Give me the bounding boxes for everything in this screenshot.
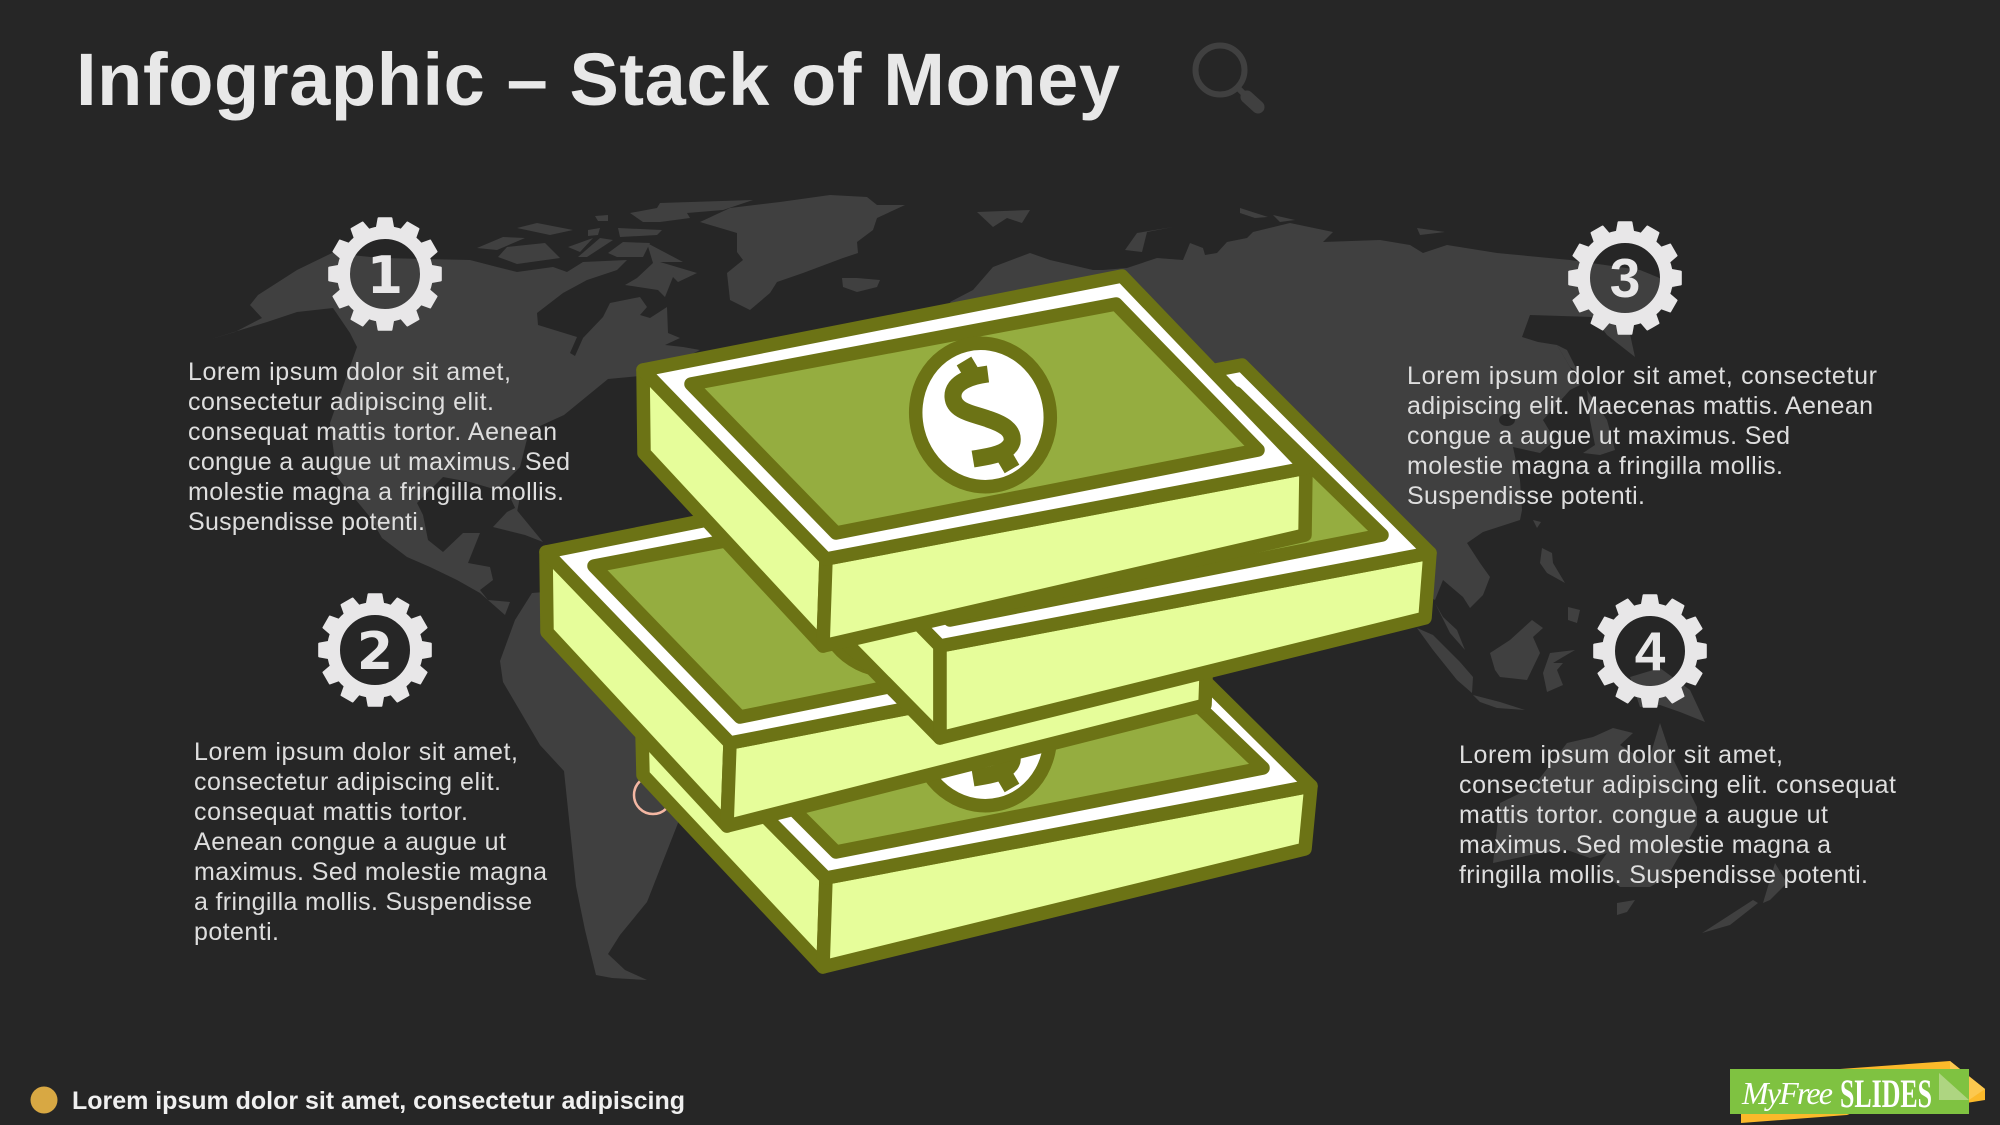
icon: gear 4: 4 (1635, 620, 1666, 682)
text block 1: congue a augue ut maximus. Sed (188, 448, 570, 476)
icon: gear 3 (1569, 222, 1681, 334)
text block 1: consectetur adipiscing elit. (188, 388, 494, 416)
text block 3: Lorem ipsum dolor sit amet, consectetur (1407, 362, 1877, 390)
footer text: Lorem ipsum dolor sit amet, consectetur adipiscing (72, 1087, 685, 1115)
text block 1: consequat mattis tortor. Aenean (188, 418, 557, 446)
text block 4: Lorem ipsum dolor sit amet, (1459, 741, 1783, 769)
logo: MyFreeSlides: MyFree (1741, 1075, 1833, 1111)
text block 3: Suspendisse potenti. (1407, 482, 1645, 510)
text block 2: Aenean congue a augue ut (194, 828, 506, 856)
text block 2: maximus. Sed molestie magna (194, 858, 547, 886)
section 1 (188, 218, 570, 536)
text block 4: maximus. Sed molestie magna a (1459, 831, 1831, 859)
logo: MyFreeSlides: SLIDES (1840, 1071, 1932, 1116)
text block 2: consectetur adipiscing elit. (194, 768, 501, 796)
text block 4 (1459, 741, 1896, 889)
icon: gear 1 (329, 218, 441, 330)
icon: gear 4 (1594, 595, 1706, 707)
text block 2: Lorem ipsum dolor sit amet, (194, 738, 518, 766)
text block 4: mattis tortor. congue a augue ut (1459, 801, 1828, 829)
text block 2: consequat mattis tortor. (194, 798, 468, 826)
footer bullet (30, 1086, 58, 1114)
text block 2: potenti. (194, 918, 279, 946)
text block 3: molestie magna a fringilla mollis. (1407, 452, 1783, 480)
text block 1: molestie magna a fringilla mollis. (188, 478, 564, 506)
text block 3 (1407, 362, 1877, 510)
section 4 (1459, 595, 1896, 889)
title: Infographic – Stack of Money (76, 38, 1120, 121)
icon: gear 1: 1 (367, 246, 403, 306)
bottom stack of bills (641, 598, 1311, 967)
icon: dollar coin (901, 329, 1065, 501)
pink ring behind the stacks (634, 776, 672, 814)
text block 1: Lorem ipsum dolor sit amet, (188, 358, 511, 386)
money stack illustration (546, 276, 1430, 967)
top stack of bills (643, 276, 1306, 646)
logo: MyFreeSlides (1730, 1061, 1985, 1123)
icon: gear 3: 3 (1610, 247, 1640, 309)
icon: gear 2 (319, 594, 431, 706)
text block 3: adipiscing elit. Maecenas mattis. Aenean (1407, 392, 1873, 420)
world map background (208, 195, 1787, 980)
section 3 (1407, 222, 1877, 510)
text block 4: fringilla mollis. Suspendisse potenti. (1459, 861, 1868, 889)
text block 4: consectetur adipiscing elit. consequat (1459, 771, 1896, 799)
icon: gear 2: 2 (357, 622, 393, 682)
text block 1: Suspendisse potenti. (188, 508, 425, 536)
text block 2 (194, 738, 547, 946)
middle left stack of bills (546, 457, 1207, 826)
section 2 (194, 594, 547, 946)
icon: magnifying glass (1196, 46, 1258, 107)
middle right stack of bills (755, 365, 1430, 738)
text block 2: a fringilla mollis. Suspendisse (194, 888, 532, 916)
text block 1 (188, 358, 570, 536)
text block 3: congue a augue ut maximus. Sed (1407, 422, 1790, 450)
